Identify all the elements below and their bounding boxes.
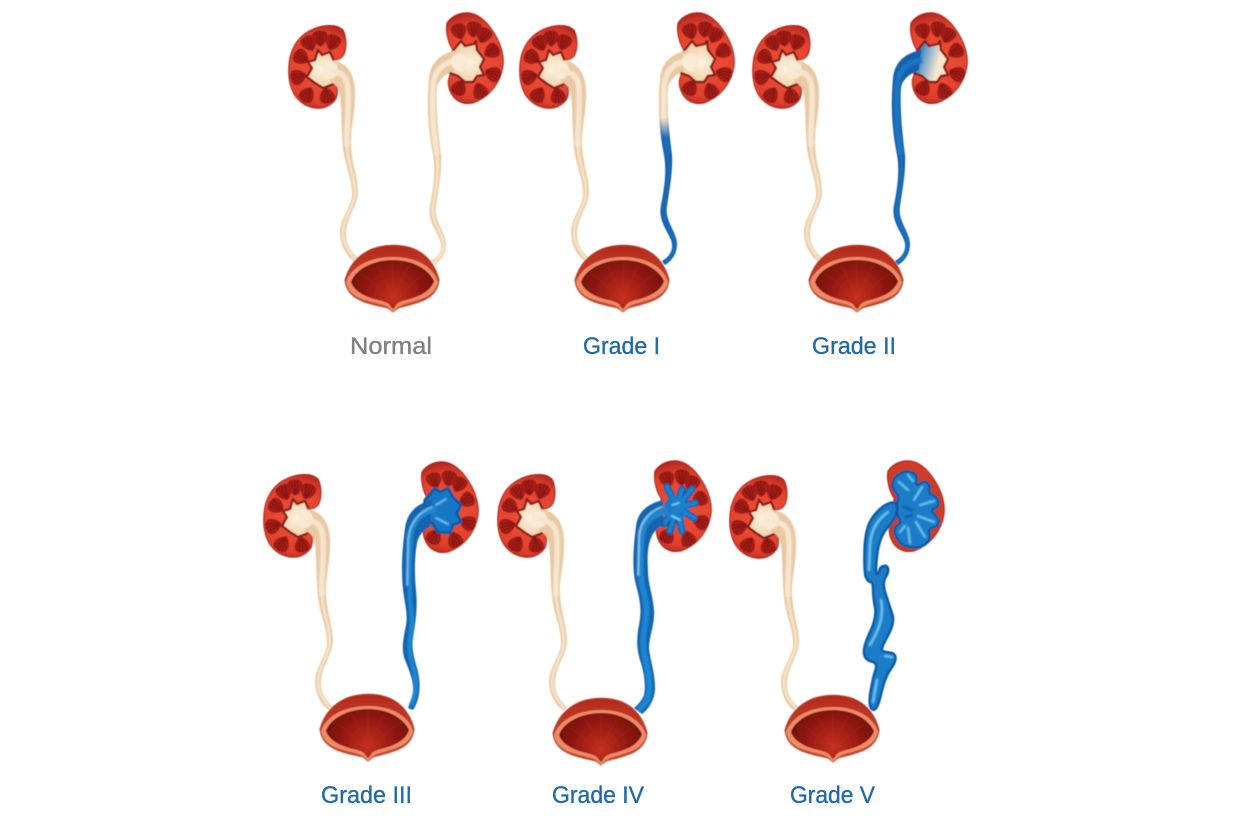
- label: Normal: Normal: [350, 333, 432, 360]
- label: Grade II: Grade II: [812, 333, 896, 360]
- illustration: grade III reflux, dilated pelvis: [264, 462, 478, 761]
- label: Grade III: Grade III: [321, 782, 412, 809]
- panel: Grade III: [264, 462, 478, 809]
- panel: Grade I: [520, 13, 734, 360]
- label: Grade I: Grade I: [583, 333, 660, 360]
- illustration: grade I reflux, lower ureter blue: [520, 13, 734, 312]
- panel: Grade V: [730, 461, 944, 809]
- illustration: normal urinary tract: [289, 13, 503, 312]
- label: Grade IV: Grade IV: [552, 782, 644, 809]
- panel: Grade II: [753, 13, 967, 360]
- illustration: grade IV reflux, tortuous ureter: [498, 461, 711, 765]
- illustration: grade II reflux, ureter to pelvis blue: [753, 13, 967, 312]
- panel: Normal: [289, 13, 503, 360]
- label: Grade V: Grade V: [790, 782, 875, 809]
- panel: Grade IV: [498, 461, 711, 809]
- illustration: grade V reflux, massively dilated system: [730, 461, 944, 762]
